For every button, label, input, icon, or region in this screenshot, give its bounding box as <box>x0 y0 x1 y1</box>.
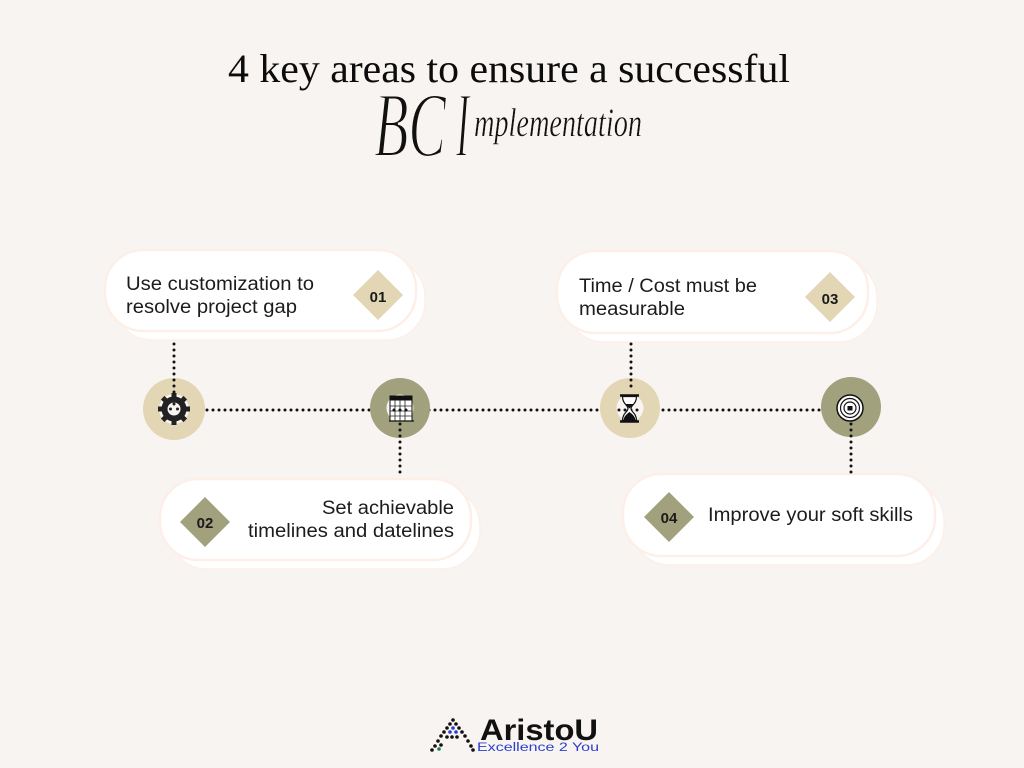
subtitle: script: BC <box>374 74 447 177</box>
step 01 badge <box>353 270 403 320</box>
step 04 badge <box>644 492 694 542</box>
logo mark: dotted triangle <box>430 718 475 752</box>
subtitle: script: mplementation <box>474 100 642 145</box>
step 01 text <box>126 274 314 318</box>
vertical connector: step 02 <box>398 424 402 473</box>
logo tagline: Excellence 2 You <box>477 742 599 754</box>
logo name: AristoU <box>480 714 598 747</box>
step 04 text: Improve your soft skills <box>708 505 913 526</box>
step 01 text: resolve project gap <box>126 297 297 318</box>
step 04 badge: 04 <box>661 510 678 527</box>
step 02 text: Set achievable <box>322 498 454 519</box>
vertical connector: step 03 <box>630 344 632 392</box>
step 03 badge: 03 <box>822 291 838 308</box>
horizontal timeline connector <box>207 408 822 412</box>
logo <box>430 714 599 754</box>
title: 4 key areas to ensure a successful <box>228 46 790 91</box>
subtitle: script: I <box>455 74 471 177</box>
icon: hourglass <box>600 378 660 438</box>
step 03 text <box>579 276 757 320</box>
step 03 text: Time / Cost must be <box>579 276 757 297</box>
step 02 text <box>248 498 454 542</box>
step 02 badge: 02 <box>197 515 213 532</box>
vertical connector: step 01 <box>172 344 176 398</box>
vertical connector: step 04 <box>850 424 852 473</box>
step 01 badge: 01 <box>370 289 386 306</box>
panel: step 01 <box>105 250 425 340</box>
panel: step 02 <box>160 479 480 569</box>
step 02 badge <box>180 497 230 547</box>
panel: step 04 <box>623 474 944 565</box>
panel: step 03 <box>557 251 877 342</box>
step 03 text: measurable <box>579 299 685 320</box>
icon: gear <box>143 378 205 440</box>
subtitle: script <box>374 74 642 177</box>
icon: calendar <box>370 378 430 438</box>
step 01 text: Use customization to <box>126 274 314 295</box>
step 02 text: timelines and datelines <box>248 521 454 542</box>
step 03 badge <box>805 272 855 322</box>
icon: maze <box>821 377 881 437</box>
